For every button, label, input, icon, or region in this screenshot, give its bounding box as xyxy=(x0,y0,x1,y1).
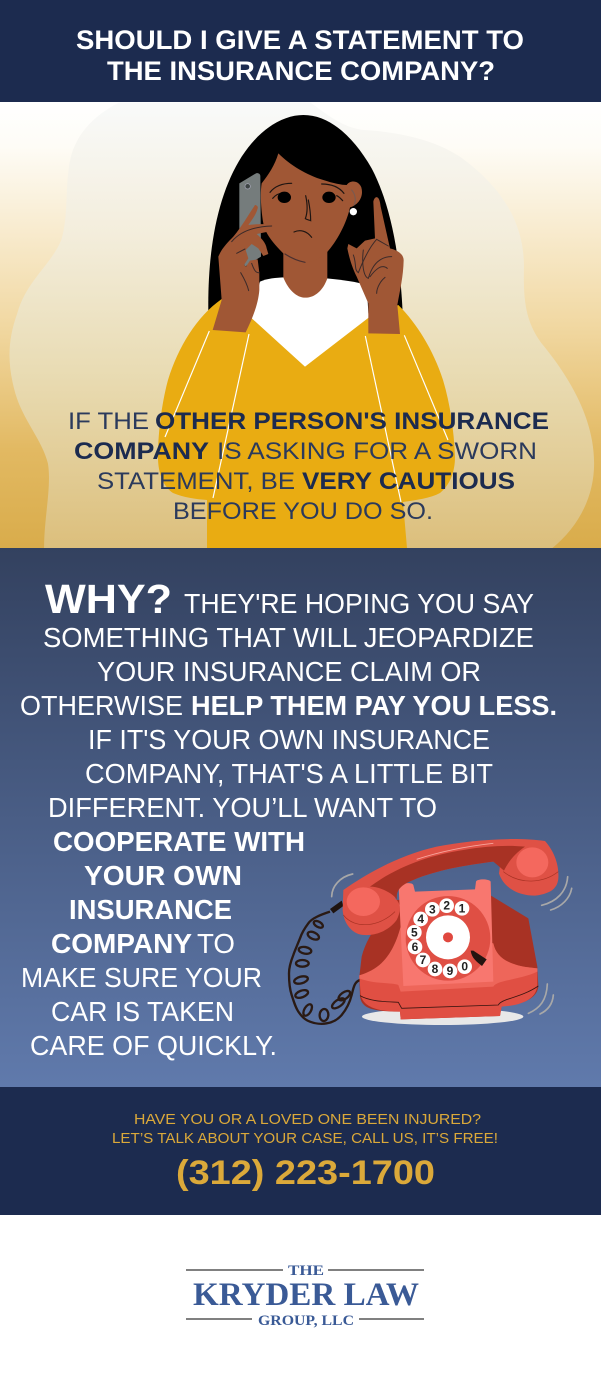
neck xyxy=(283,243,327,298)
dial numbers: 3 xyxy=(429,902,436,916)
why text: CARE OF QUICKLY. xyxy=(30,1030,277,1061)
phone number: (312) 223-1700 xyxy=(176,1154,435,1192)
hand lines xyxy=(232,226,392,293)
shadow xyxy=(362,1008,523,1025)
title xyxy=(76,25,524,86)
why text: YOUR INSURANCE CLAIM OR xyxy=(97,656,481,687)
right hand xyxy=(347,197,404,334)
dial numbers: 1 xyxy=(459,901,466,915)
panel: hero illustration xyxy=(0,102,601,548)
why text: THEY'RE HOPING YOU SAY xyxy=(184,588,534,619)
dial numbers: 7 xyxy=(420,953,427,967)
dial numbers: 0 xyxy=(461,960,468,974)
handset xyxy=(343,839,558,935)
statement text: IS ASKING FOR A SWORN xyxy=(217,438,537,465)
why text: OTHERWISE xyxy=(20,690,183,721)
dial numbers: 4 xyxy=(417,912,424,926)
why text: IF IT'S YOUR OWN INSURANCE xyxy=(88,724,490,755)
logo: The Kryder Law Group: THE xyxy=(288,1263,324,1279)
statement text xyxy=(68,408,549,525)
face details xyxy=(270,183,355,262)
sweater sleeve lines xyxy=(165,331,448,502)
why text: COMPANY, THAT'S A LITTLE BIT xyxy=(85,758,493,789)
illustration: woman on phone xyxy=(158,115,455,548)
phone xyxy=(239,173,261,267)
statement text: COMPANY xyxy=(74,438,209,465)
sweater xyxy=(158,299,455,548)
call to action text: HAVE YOU OR A LOVED ONE BEEN INJURED? xyxy=(134,1111,481,1128)
dial numbers: 8 xyxy=(432,962,439,976)
why text: TO xyxy=(197,928,235,959)
dial numbers: 9 xyxy=(447,964,454,978)
statement text: IF THE xyxy=(68,408,149,435)
dial numbers: 6 xyxy=(412,940,419,954)
title: SHOULD I GIVE A STATEMENT TO xyxy=(76,25,524,55)
why text: MAKE SURE YOUR xyxy=(21,962,262,993)
why text xyxy=(20,576,557,1061)
title: THE INSURANCE COMPANY? xyxy=(107,56,495,86)
dial plate xyxy=(399,879,493,986)
call to action text xyxy=(112,1111,498,1147)
call to action text: LET’S TALK ABOUT YOUR CASE, CALL US, IT’S FREE! xyxy=(112,1130,498,1147)
statement text: STATEMENT, BE xyxy=(97,468,295,495)
statement text: BEFORE YOU DO SO. xyxy=(173,498,433,525)
panel: header xyxy=(0,0,601,102)
why text: COMPANY xyxy=(51,928,192,959)
face xyxy=(261,153,362,262)
logo: The Kryder Law Group xyxy=(186,1263,424,1329)
why text: HELP THEM PAY YOU LESS. xyxy=(191,690,557,721)
white shirt xyxy=(250,277,369,367)
statement text: VERY CAUTIOUS xyxy=(302,468,515,495)
why text: CAR IS TAKEN xyxy=(51,996,234,1027)
dial numbers: 5 xyxy=(411,925,418,939)
why text: SOMETHING THAT WILL JEOPARDIZE xyxy=(43,622,534,653)
hair xyxy=(208,115,403,313)
vibration marks xyxy=(332,874,572,1014)
base lower xyxy=(359,927,537,1019)
why text: WHY? xyxy=(45,576,172,622)
finger stop xyxy=(471,951,487,966)
why text: DIFFERENT. YOU’LL WANT TO xyxy=(48,792,437,823)
why text: INSURANCE xyxy=(69,894,232,925)
why text: YOUR OWN xyxy=(84,860,242,891)
cord xyxy=(289,912,360,1024)
panel: call to action footer xyxy=(0,1087,601,1215)
logo: The Kryder Law Group: GROUP, LLC xyxy=(258,1313,354,1329)
base back xyxy=(359,895,538,1019)
dial numbers xyxy=(407,898,472,978)
dial numbers: 2 xyxy=(443,899,450,913)
icon: red rotary telephone xyxy=(289,839,572,1025)
statement text: OTHER PERSON'S INSURANCE xyxy=(155,408,549,435)
left hand xyxy=(213,205,273,332)
panel: why xyxy=(0,548,601,1087)
why text: COOPERATE WITH xyxy=(53,826,305,857)
earring xyxy=(350,208,357,215)
logo: The Kryder Law Group: KRYDER LAW xyxy=(193,1277,419,1313)
